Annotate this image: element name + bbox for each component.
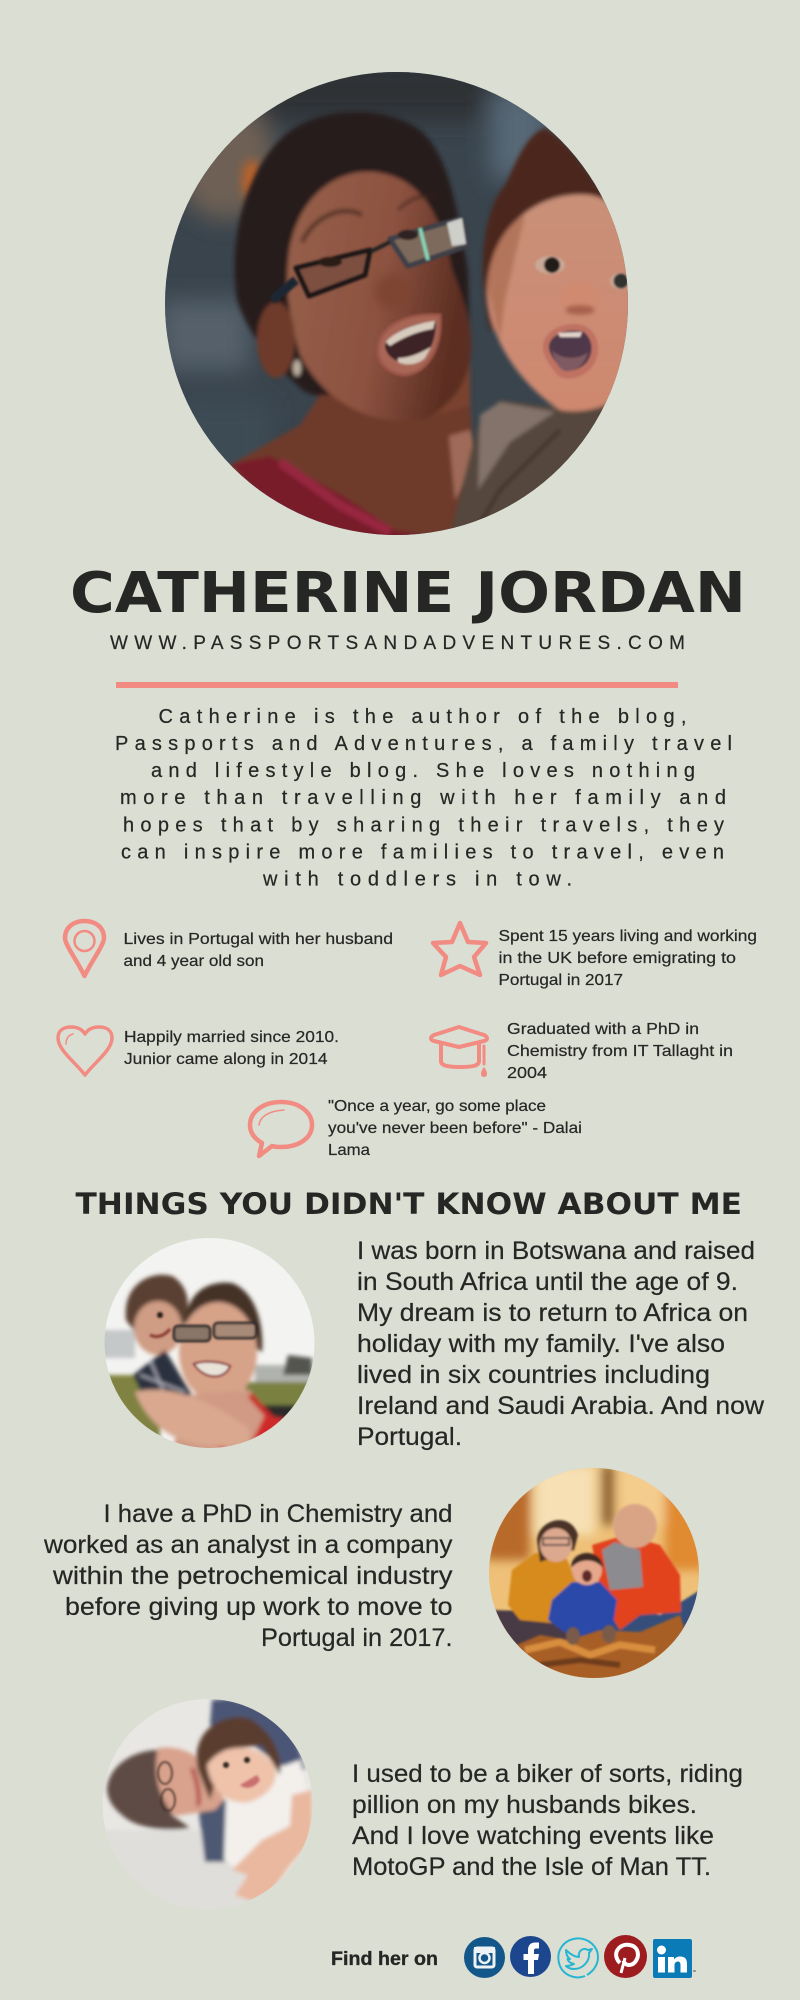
paragraph: biker: I used to be a biker of sorts, riding	[352, 1760, 743, 1788]
child mouth	[543, 324, 598, 379]
man	[592, 1535, 681, 1630]
bio paragraph: with toddlers in tow.	[262, 868, 572, 890]
text: Dalai Lama quote: Lama	[328, 1142, 370, 1159]
paragraph: biker: MotoGP and the Isle of Man TT.	[352, 1853, 711, 1881]
child	[548, 1582, 617, 1640]
paragraph: Botswana: Portugal.	[357, 1423, 462, 1451]
mouth	[378, 315, 440, 375]
text: UK years: Spent 15 years living and working	[498, 928, 757, 945]
bio paragraph: can inspire more families to travel, even	[121, 842, 724, 864]
woman	[508, 1553, 578, 1625]
dark legs and jeans	[496, 1608, 568, 1656]
woman face	[287, 172, 471, 421]
bio paragraph	[115, 706, 732, 890]
paragraph: PhD	[43, 1500, 453, 1652]
shirt	[224, 1760, 315, 1868]
arm	[135, 1390, 250, 1447]
woman face	[156, 1747, 224, 1816]
paragraph: Botswana: holiday with my family. I've also	[357, 1330, 725, 1358]
bio paragraph: and lifestyle blog. She loves nothing	[151, 760, 695, 782]
neck	[328, 364, 472, 412]
text: married	[124, 1029, 339, 1068]
text: UK years: Portugal in 2017	[498, 972, 623, 989]
boy hair	[197, 1717, 281, 1800]
child clothes	[451, 400, 606, 528]
paragraph: PhD: before giving up work to move to	[65, 1593, 452, 1621]
glasses	[296, 250, 370, 296]
text: Dalai Lama quote	[328, 1098, 582, 1159]
child face	[487, 195, 640, 411]
text: lives in Portugal: and 4 year old son	[124, 953, 264, 970]
paragraph: PhD: I have a PhD in Chemistry and	[104, 1500, 452, 1528]
photo: woman and boy piggyback	[104, 1238, 314, 1448]
website url: WWW.PASSPORTSANDADVENTURES.COM	[110, 633, 685, 654]
main portrait photo	[165, 72, 628, 535]
icon: speech bubble	[250, 1102, 312, 1156]
paragraph: Botswana: I was born in Botswana and raised	[357, 1237, 755, 1265]
paragraph: Botswana: My dream is to return to Africa on	[357, 1299, 748, 1327]
paragraph: Botswana	[357, 1237, 765, 1451]
nose shadow	[376, 276, 401, 307]
paragraph: Botswana: Ireland and Saudi Arabia. And now	[357, 1392, 765, 1420]
bio paragraph: Catherine is the author of the blog,	[158, 706, 686, 728]
text: PhD graduation: Chemistry from IT Tallaght in	[507, 1043, 733, 1060]
text: PhD graduation: Graduated with a PhD in	[507, 1021, 699, 1038]
icon: linkedin	[653, 1939, 696, 1978]
text: UK years: in the UK before emigrating to	[498, 950, 736, 967]
arm	[232, 1790, 312, 1905]
photo: mother and son on bed	[102, 1699, 312, 1909]
icon: heart	[58, 1027, 112, 1075]
icon: facebook	[510, 1936, 551, 1977]
bio paragraph: more than travelling with her family and	[120, 787, 726, 809]
paragraph: biker: pillion on my husbands bikes.	[352, 1791, 697, 1819]
child nose	[561, 283, 599, 313]
paragraph: Botswana: lived in six countries including	[357, 1361, 710, 1389]
icon: instagram	[464, 1937, 505, 1978]
icon: graduation cap	[431, 1027, 487, 1077]
paragraph: PhD: Portugal in 2017.	[261, 1624, 452, 1652]
boy	[122, 1271, 192, 1332]
ear	[257, 302, 295, 378]
boy face	[207, 1748, 276, 1803]
text: Dalai Lama quote: you've never been before" - Dalai	[328, 1120, 582, 1137]
icon: pinterest	[604, 1935, 647, 1978]
text: married: Happily married since 2010.	[124, 1029, 339, 1046]
text: Dalai Lama quote: "Once a year, go some place	[328, 1098, 546, 1115]
leaves	[517, 1614, 685, 1678]
dress	[232, 456, 420, 535]
text: lives in Portugal: Lives in Portugal with her husband	[124, 931, 393, 948]
bio paragraph: hopes that by sharing their travels, they	[123, 814, 724, 836]
chest	[230, 392, 478, 534]
photo: family in autumn leaves	[489, 1468, 699, 1678]
text: UK years	[498, 928, 757, 989]
text: married: Junior came along in 2014	[124, 1051, 328, 1068]
text: PhD graduation: 2004	[507, 1065, 547, 1082]
child eyes	[535, 256, 565, 274]
name title: CATHERINE JORDAN	[70, 561, 746, 626]
paragraph: biker: And I love watching events like	[352, 1822, 714, 1850]
paragraph: PhD: worked as an analyst in a company	[43, 1531, 453, 1559]
hair	[235, 112, 470, 400]
woman	[186, 1283, 262, 1352]
icon: star	[433, 923, 486, 975]
woman hair	[107, 1750, 190, 1829]
text: PhD graduation	[507, 1021, 733, 1082]
text: lives in Portugal	[124, 931, 393, 970]
paragraph: Botswana: in South Africa until the age of 9.	[357, 1268, 738, 1296]
section heading: THINGS YOU DIDN'T KNOW ABOUT ME	[76, 1187, 742, 1221]
icon: location pin	[65, 921, 104, 976]
find her on label: Find her on	[331, 1949, 438, 1970]
paragraph: biker	[352, 1760, 743, 1881]
icon: twitter	[558, 1938, 598, 1977]
eyebrows	[302, 211, 362, 242]
divider bar	[116, 682, 678, 688]
child hair	[480, 126, 604, 332]
bio paragraph: Passports and Adventures, a family travel	[115, 733, 732, 755]
paragraph: PhD: within the petrochemical industry	[52, 1562, 453, 1590]
